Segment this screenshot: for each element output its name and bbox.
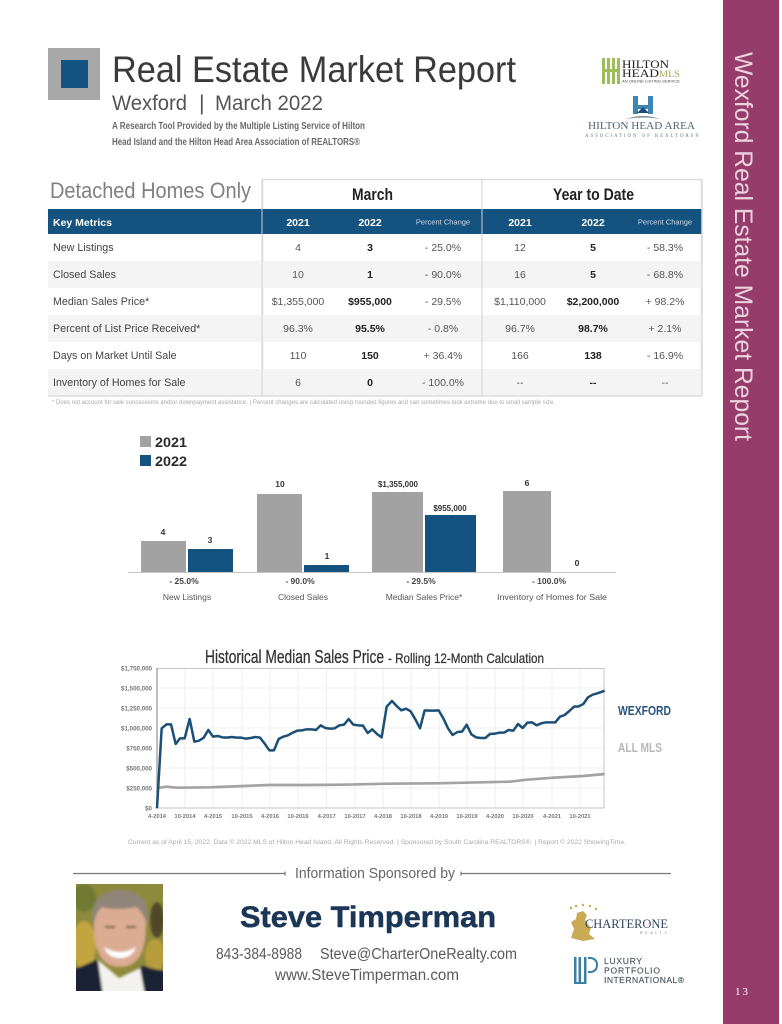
row: Percent of List Price Received: - 0.8% [428, 323, 458, 335]
row: Inventory of Homes for Sale: -- [590, 377, 597, 389]
page number: 13 [735, 986, 748, 998]
x axis labels: 4-2020 [486, 814, 504, 820]
bars: Inventory of Homes for Sale: 0 [575, 558, 580, 568]
row: New Listings: - 25.0% [425, 242, 461, 254]
group heading: March: March [352, 185, 393, 204]
row: Inventory of Homes for Sale: Inventory of Homes for Sale [53, 377, 186, 389]
sponsor divider heading [73, 865, 671, 882]
bars: Closed Sales: - 90.0% [285, 576, 315, 586]
series: All MLS [159, 774, 605, 788]
bars: Median Sales Price: $955,000 [433, 504, 467, 513]
row: New Listings: - 58.3% [647, 242, 683, 254]
bars: Closed Sales: Closed Sales [278, 592, 328, 602]
row: Closed Sales: - 68.8% [647, 269, 683, 281]
x axis labels: 10-2015 [231, 814, 253, 820]
row: Closed Sales: 16 [514, 269, 526, 281]
row: Percent of List Price Received: 96.3% [283, 323, 313, 335]
row: Median Sales Price: Median Sales Price* [53, 296, 149, 308]
bars: New Listings: - 25.0% [169, 576, 199, 586]
row: Days on Market Until Sale: 110 [290, 350, 307, 362]
bars: Closed Sales: 10 [275, 479, 285, 489]
row: Median Sales Price: $1,355,000 [272, 296, 324, 308]
subtitle: Wexford [112, 91, 187, 115]
logo: Hilton Head MLS: AN ONLINE LISTING SERVICE [622, 80, 681, 84]
section heading: Detached Homes Only [50, 178, 252, 203]
row: New Listings: 5 [590, 242, 596, 254]
group heading: Year to Date: Year to Date [553, 185, 634, 204]
bars: New Listings: New Listings [163, 592, 211, 602]
row: Closed Sales: 10 [292, 269, 304, 281]
x axis labels: 10-2018 [400, 814, 422, 820]
logo: Hilton Head MLS: HILTON [622, 57, 669, 71]
bars: Inventory of Homes for Sale: Inventory of Homes for Sale [497, 592, 607, 602]
series label: Wexford: WEXFORD [618, 703, 671, 718]
bars: Median Sales Price: $1,355,000 [378, 480, 419, 489]
sponsor photo [76, 884, 163, 991]
logo: Luxury Portfolio International: PORTFOLIO [604, 966, 660, 976]
y axis labels: $1,750,000 [121, 666, 153, 672]
row: Days on Market Until Sale: - 16.9% [647, 350, 683, 362]
row: New Listings: 12 [514, 242, 526, 254]
row: Inventory of Homes for Sale: 6 [295, 377, 301, 389]
row: Days on Market Until Sale: 150 [361, 350, 379, 362]
row: Days on Market Until Sale: Days on Market Until Sale [53, 350, 177, 362]
row: New Listings [53, 242, 683, 254]
sponsor contact details: 843-384-8988 [216, 946, 302, 963]
logo: Hilton Head Area Association of Realtors: ASSOCIATION OF REALTORS® [585, 133, 699, 139]
x axis labels: 10-2021 [569, 814, 591, 820]
provider note: A Research Tool Provided by the Multiple Listing Service of Hilton [112, 120, 365, 132]
row: Median Sales Price: + 98.2% [646, 296, 684, 308]
x axis labels: 10-2020 [512, 814, 534, 820]
bar chart [128, 478, 616, 602]
x axis labels: 4-2015 [204, 814, 223, 820]
x axis labels: 10-2016 [287, 814, 309, 820]
bar chart legend: 2022 [155, 453, 187, 469]
row: Median Sales Price: - 29.5% [425, 296, 461, 308]
row: Inventory of Homes for Sale [53, 377, 669, 389]
x axis labels [148, 814, 591, 820]
bars: New Listings: 4 [161, 527, 166, 537]
row: Inventory of Homes for Sale: -- [516, 377, 524, 389]
row: Closed Sales: 1 [367, 269, 373, 281]
row: Closed Sales: Closed Sales [53, 269, 116, 281]
row: Percent of List Price Received: + 2.1% [649, 323, 681, 335]
row: Percent of List Price Received: 95.5% [355, 323, 386, 335]
bars: Inventory of Homes for Sale: 6 [525, 478, 530, 488]
logo: CharterOne Realty: REALTY [640, 931, 668, 935]
x axis labels: 4-2016 [261, 814, 280, 820]
series label: All MLS: ALL MLS [618, 740, 662, 755]
x axis labels: 10-2017 [344, 814, 366, 820]
sidebar band [723, 0, 779, 1024]
y axis labels: $1,500,000 [121, 686, 153, 692]
bars: Inventory of Homes for Sale [497, 478, 607, 602]
header icon [48, 48, 100, 100]
logo: CharterOne Realty: CHARTERONE [585, 917, 668, 931]
sponsor divider heading: Information Sponsored by [295, 865, 455, 882]
logo: Hilton Head MLS [602, 57, 681, 84]
provider note: Head Island and the Hilton Head Area Association of REALTORS® [112, 136, 360, 148]
line chart: historical median sales price [121, 666, 605, 820]
row: Median Sales Price [53, 296, 684, 308]
line chart title [205, 647, 544, 667]
line chart title: Historical Median Sales Price [205, 647, 384, 667]
subtitle [112, 91, 323, 115]
row: Percent of List Price Received: 96.7% [505, 323, 535, 335]
x axis labels: 4-2014 [148, 814, 167, 820]
row: Percent of List Price Received: Percent of List Price Received* [53, 323, 200, 335]
logo: Luxury Portfolio International: LUXURY [604, 956, 642, 966]
sponsor name: Steve Timperman [240, 901, 496, 934]
y axis labels: $1,250,000 [121, 706, 153, 712]
bar chart legend: 2021 [155, 434, 187, 450]
row: Inventory of Homes for Sale: - 100.0% [422, 377, 464, 389]
key metrics table [48, 179, 702, 396]
row: Inventory of Homes for Sale: -- [662, 377, 669, 389]
row: Days on Market Until Sale [53, 350, 683, 362]
sponsor contact details: Steve@CharterOneRealty.com [320, 946, 517, 963]
bars: New Listings: 3 [208, 535, 213, 545]
row: Median Sales Price: $955,000 [348, 296, 392, 308]
y axis labels: $500,000 [126, 766, 153, 772]
logo: CharterOne Realty [570, 904, 668, 941]
row: Days on Market Until Sale: 138 [584, 350, 602, 362]
sponsor contact details: www.SteveTimperman.com [274, 967, 459, 984]
y axis labels: $250,000 [126, 786, 153, 792]
y axis labels: $1,000,000 [121, 726, 153, 732]
y axis labels: $0 [145, 806, 153, 812]
x axis labels: 4-2017 [318, 814, 336, 820]
header row: 2021 [286, 217, 310, 229]
provider note [112, 120, 365, 148]
bars: Inventory of Homes for Sale: - 100.0% [532, 576, 566, 586]
data source note: Current as of April 15, 2022. Data © 2022 MLS of Hilton Head Island. All Rights Reserved. | Sponsored by South Carolina REALTORS®. | Report © 2022 ShowingTime. [128, 838, 626, 846]
table footnote: * Does not account for sale concessions and/or downpayment assistance. | Percent changes are calculated using rounded figures and can sometimes look extreme due to small sample size. [52, 399, 555, 406]
bars: Median Sales Price: Median Sales Price* [386, 592, 463, 602]
header row: Percent Change [416, 218, 470, 226]
header row: 2021 [508, 217, 532, 229]
x axis labels: 4-2021 [543, 814, 562, 820]
subtitle: March 2022 [215, 91, 323, 115]
row: Median Sales Price: $1,110,000 [494, 296, 546, 308]
row: Inventory of Homes for Sale: 0 [367, 377, 373, 389]
row: Closed Sales [53, 269, 683, 281]
bars: Closed Sales: 1 [325, 551, 330, 561]
header row [53, 217, 692, 229]
bars: New Listings [141, 527, 233, 602]
row: Days on Market Until Sale: 166 [511, 350, 529, 362]
subtitle: | [199, 91, 205, 115]
logo: Hilton Head MLS: HEAD [622, 66, 659, 80]
row: Closed Sales: 5 [590, 269, 596, 281]
sidebar title: Wexford Real Estate Market Report [729, 52, 757, 441]
title block [112, 49, 517, 148]
header row: Percent Change [638, 218, 692, 226]
bars: Median Sales Price: - 29.5% [406, 576, 436, 586]
row: New Listings: New Listings [53, 242, 114, 254]
row: Percent of List Price Received [53, 323, 681, 335]
x axis labels: 10-2019 [456, 814, 478, 820]
sponsor contact details [216, 946, 517, 984]
logo: Hilton Head MLS: MLS [659, 69, 680, 79]
x axis labels: 4-2019 [430, 814, 449, 820]
row: New Listings: 3 [367, 242, 373, 254]
series: Wexford [157, 691, 605, 808]
logo: Luxury Portfolio International [574, 956, 685, 985]
bars: Closed Sales [257, 479, 349, 602]
logo: Hilton Head Area Association of Realtors: HILTON HEAD AREA [588, 121, 696, 132]
row: Days on Market Until Sale: + 36.4% [424, 350, 462, 362]
y axis labels: $750,000 [126, 746, 153, 752]
line chart title: - Rolling 12-Month Calculation [388, 650, 544, 666]
x axis labels: 4-2018 [374, 814, 393, 820]
bar chart legend [140, 434, 187, 469]
bars: Median Sales Price [372, 480, 476, 602]
row: Median Sales Price: $2,200,000 [567, 296, 619, 308]
row: Percent of List Price Received: 98.7% [578, 323, 609, 335]
chart gridlines [157, 668, 604, 808]
row: Closed Sales: - 90.0% [425, 269, 461, 281]
report title: Real Estate Market Report [112, 49, 517, 90]
header row: 2022 [358, 217, 382, 229]
logo: Hilton Head Area Association of Realtors [585, 96, 699, 139]
y axis labels [121, 666, 153, 812]
x axis labels: 10-2014 [174, 814, 196, 820]
header row: Key Metrics [53, 217, 112, 229]
header row: 2022 [581, 217, 605, 229]
logo: Luxury Portfolio International: INTERNATIONAL® [604, 975, 685, 985]
row: New Listings: 4 [295, 242, 301, 254]
